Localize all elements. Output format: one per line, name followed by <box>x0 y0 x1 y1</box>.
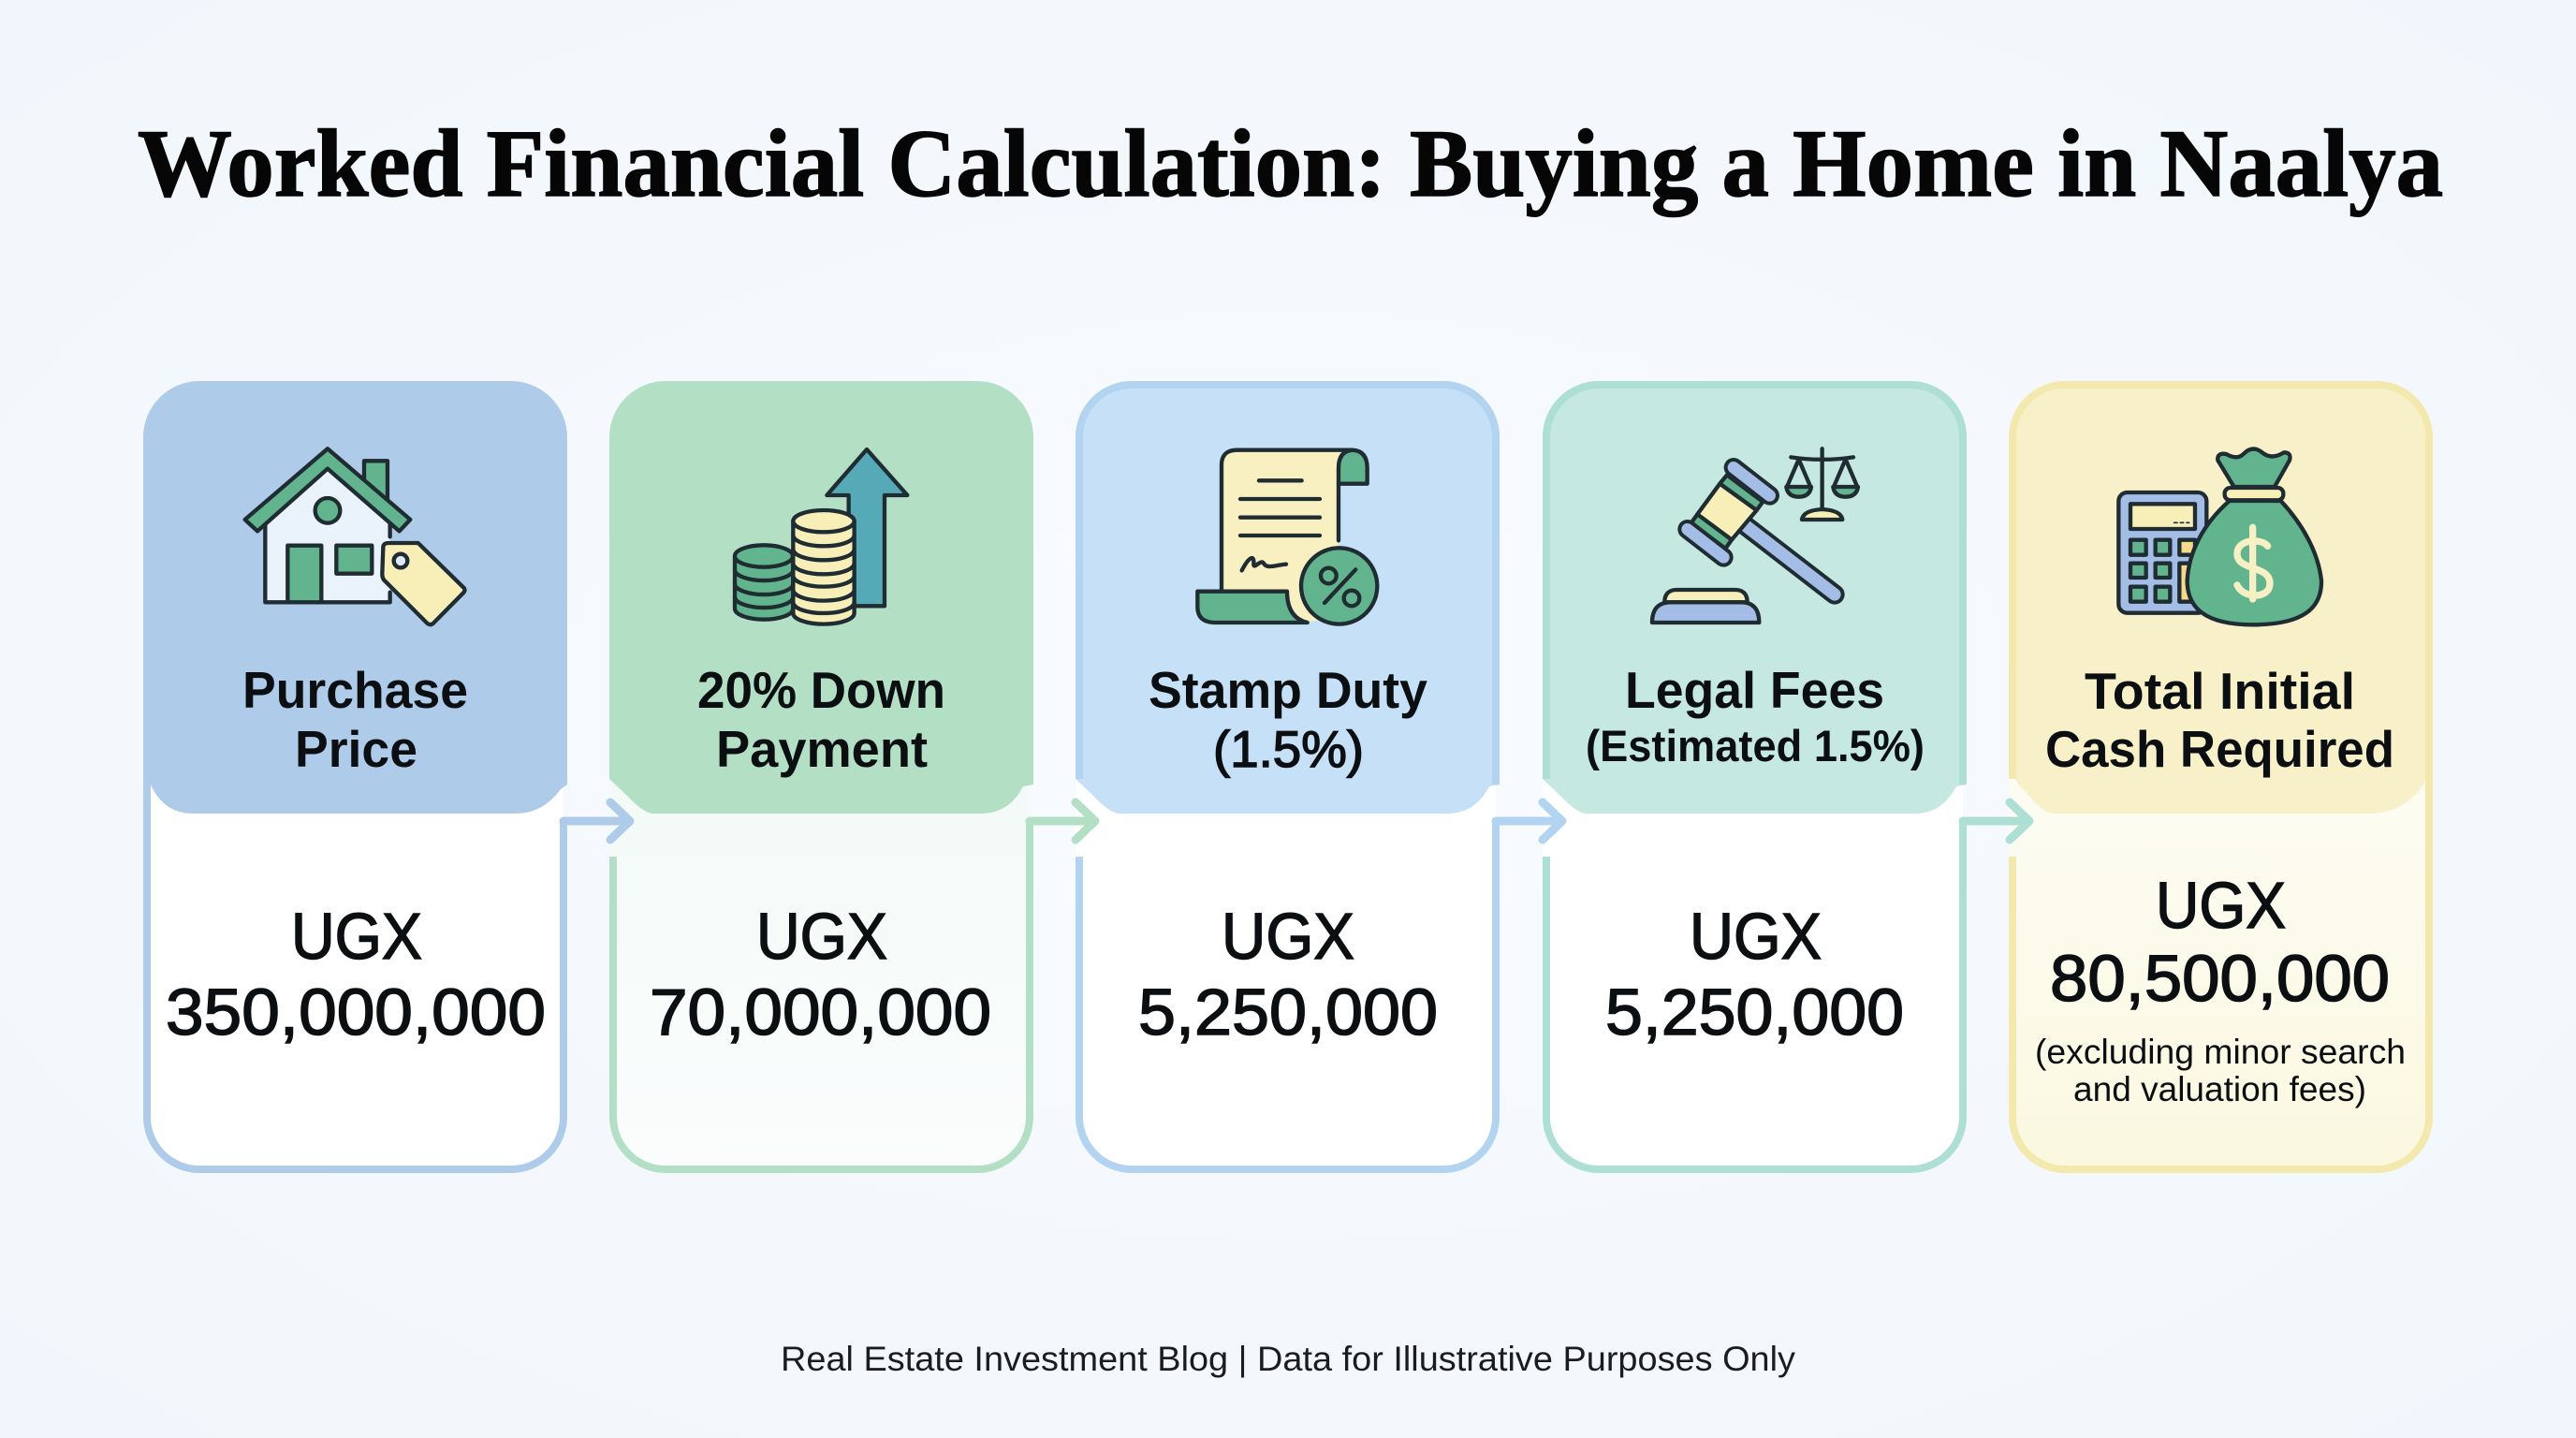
icon: gavel and scales of justice <box>1652 448 1858 623</box>
note: excluding minor search and valuation fees: (excluding minor search <box>2035 1033 2406 1071</box>
value: UGX 5,250,000: 5,250,000 <box>1138 976 1438 1049</box>
heading: Purchase Price: Price <box>295 720 417 778</box>
heading: Total Initial Cash Required: Cash Required <box>2045 720 2394 778</box>
icon: stamp duty scroll with percent badge <box>1197 450 1377 624</box>
heading: 20% Down Payment: 20% Down <box>697 661 945 719</box>
icon: coin stacks and up arrow <box>735 449 907 624</box>
heading: Legal Fees (Estimated 1.5%) <box>1586 661 1925 770</box>
icon: calculator and money bag <box>2118 449 2321 624</box>
value: UGX 70,000,000: 70,000,000 <box>650 976 991 1049</box>
value: UGX 350,000,000: 350,000,000 <box>166 976 546 1049</box>
title: Worked Financial Calculation: Buying a Home in Naalya <box>138 110 2443 217</box>
note: excluding minor search and valuation fees <box>2035 1033 2406 1108</box>
heading: Stamp Duty (1.5%) <box>1149 661 1427 778</box>
value: UGX 350,000,000: UGX <box>291 900 422 973</box>
value: UGX 70,000,000: UGX <box>756 900 887 973</box>
panel: stamp duty <box>1076 381 1500 1169</box>
heading: Legal Fees (Estimated 1.5%): Legal Fees <box>1625 661 1884 719</box>
footer: Real Estate Investment Blog | Data for Illustrative Purposes Only <box>781 1340 1796 1378</box>
heading: Legal Fees (Estimated 1.5%): (Estimated 1.5%) <box>1586 721 1925 770</box>
heading: Stamp Duty (1.5%): (1.5%) <box>1213 720 1364 778</box>
heading: Purchase Price <box>242 661 468 778</box>
heading: 20% Down Payment <box>697 661 945 778</box>
panel: total initial cash required <box>2009 385 2429 1169</box>
panel: purchase price <box>143 381 567 1169</box>
panel: down payment <box>609 381 1033 1169</box>
heading: Total Initial Cash Required: Total Initial <box>2085 662 2355 720</box>
arrow: legal fees to total <box>1963 802 2029 840</box>
value: UGX 5,250,000: 5,250,000 <box>1605 976 1904 1049</box>
value: UGX 350,000,000 <box>166 900 546 1049</box>
heading: Stamp Duty (1.5%): Stamp Duty <box>1149 661 1427 719</box>
icon: house with price tag <box>245 448 464 624</box>
value: UGX 70,000,000 <box>650 900 991 1049</box>
heading: Total Initial Cash Required <box>2045 662 2394 778</box>
arrow: stamp duty to legal fees <box>1496 802 1562 840</box>
arrow: purchase price to down payment <box>564 802 630 840</box>
arrow: down payment to stamp duty <box>1030 802 1095 840</box>
value: UGX 80,500,000: 80,500,000 <box>2050 942 2390 1015</box>
panel: legal fees <box>1543 381 1967 1169</box>
value: UGX 80,500,000: UGX <box>2156 869 2286 942</box>
heading: Purchase Price: Purchase <box>242 661 468 719</box>
note: excluding minor search and valuation fees: and valuation fees) <box>2073 1070 2366 1108</box>
value: UGX 5,250,000 <box>1138 900 1438 1049</box>
heading: 20% Down Payment: Payment <box>716 720 928 778</box>
value: UGX 5,250,000: UGX <box>1222 900 1354 973</box>
value: UGX 5,250,000 <box>1605 900 1904 1049</box>
value: UGX 80,500,000 <box>2050 869 2390 1015</box>
value: UGX 5,250,000: UGX <box>1690 900 1822 973</box>
